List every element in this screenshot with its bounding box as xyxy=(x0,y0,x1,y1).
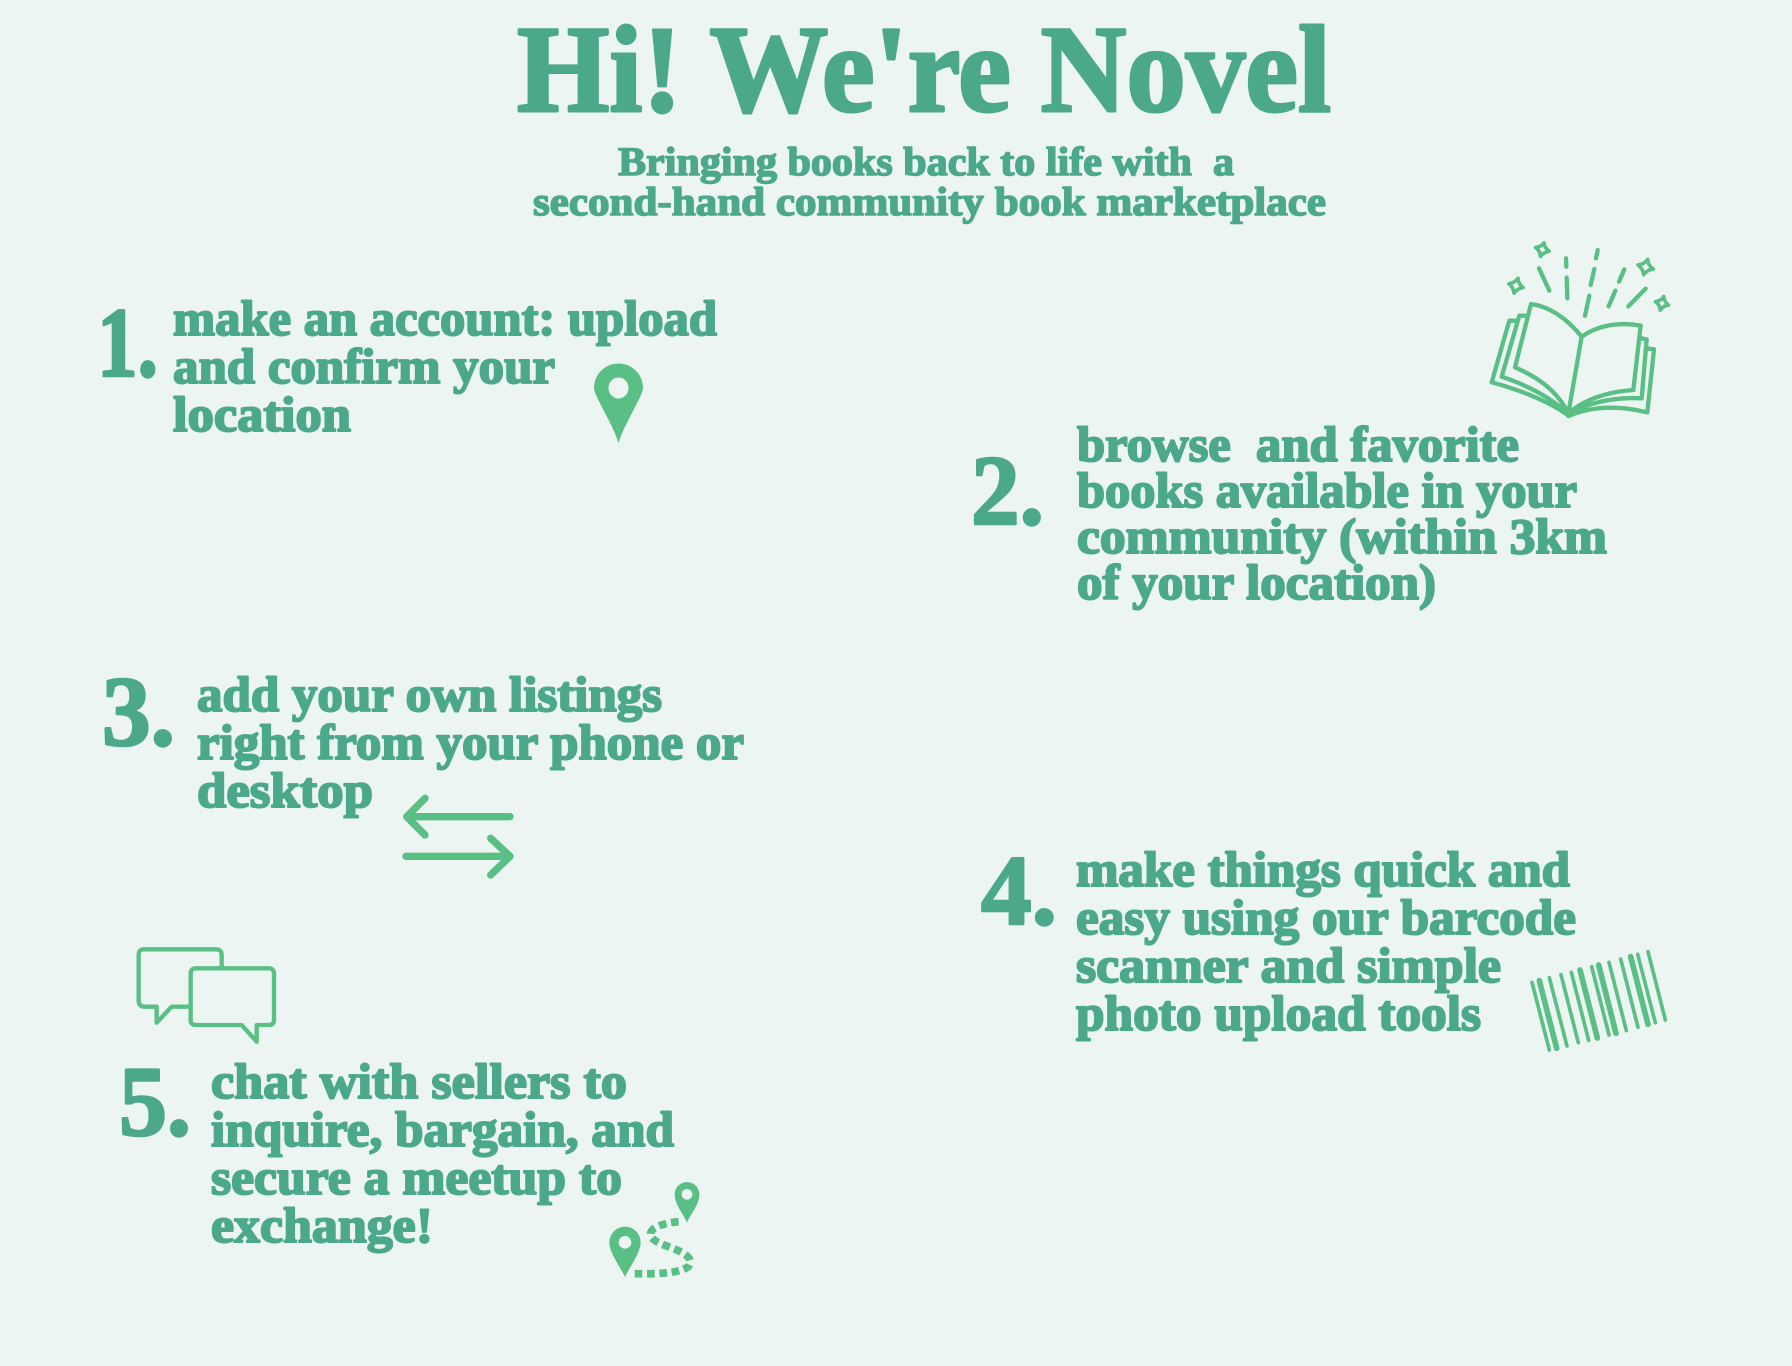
step 4 text: scanner and simple xyxy=(1076,937,1501,993)
step 4 text: easy using our barcode xyxy=(1076,889,1576,945)
icon: route between two pins xyxy=(609,1182,699,1277)
step 3 xyxy=(102,656,744,875)
step 4 text: make things quick and xyxy=(1076,841,1570,897)
step 5 text: chat with sellers to xyxy=(211,1053,627,1109)
step 2 text: books available in your xyxy=(1077,462,1577,518)
title: Hi! We're Novel xyxy=(517,1,1331,138)
step 2 text xyxy=(1077,416,1607,610)
subtitle: second-hand community book marketplace xyxy=(533,179,1326,224)
step 4 text xyxy=(1076,841,1576,1041)
step 3 number: 3. xyxy=(102,656,175,767)
step 5 text xyxy=(211,1053,674,1253)
step 2 number: 2. xyxy=(971,435,1044,546)
step 1 text: and confirm your xyxy=(173,338,555,394)
step 3 text: desktop xyxy=(197,762,373,818)
step 2 text: of your location) xyxy=(1077,554,1436,610)
step 4 text: photo upload tools xyxy=(1076,985,1481,1041)
step 5 xyxy=(119,949,699,1277)
step 5 text: exchange! xyxy=(211,1197,433,1253)
step 1 text: make an account: upload xyxy=(173,290,717,346)
step 5 text: inquire, bargain, and xyxy=(211,1101,674,1157)
subtitle: Bringing books back to life with a xyxy=(618,139,1234,184)
step 4 xyxy=(981,835,1665,1050)
icon: exchange arrows xyxy=(406,798,510,875)
step 3 text: right from your phone or xyxy=(197,714,744,770)
step 3 text: add your own listings xyxy=(197,666,662,722)
step 1 number: 1. xyxy=(97,287,158,398)
step 5 number: 5. xyxy=(119,1046,191,1157)
step 3 text xyxy=(197,666,744,818)
step 4 number: 4. xyxy=(981,835,1057,946)
step 1 text: location xyxy=(173,386,351,442)
icon: chat bubbles xyxy=(139,949,274,1042)
icon: open book with sparkles xyxy=(1492,241,1670,416)
step 1 text xyxy=(173,290,717,442)
step 1 xyxy=(97,287,717,443)
subtitle xyxy=(533,139,1326,224)
icon: barcode xyxy=(1532,952,1665,1050)
step 5 text: secure a meetup to xyxy=(211,1149,622,1205)
step 2 text: browse and favorite xyxy=(1077,416,1519,472)
step 2 text: community (within 3km xyxy=(1077,508,1607,564)
icon: location pin xyxy=(594,364,643,443)
step 2 xyxy=(971,241,1670,610)
